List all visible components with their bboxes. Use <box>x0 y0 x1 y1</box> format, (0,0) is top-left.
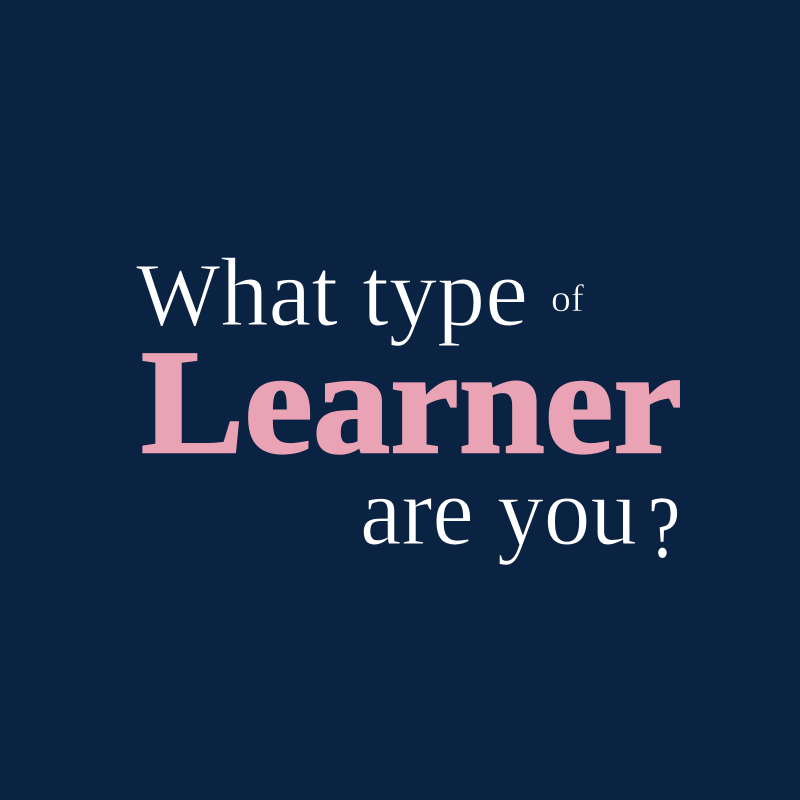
heading line: What type: What type <box>136 239 528 346</box>
heading word: of: of <box>551 278 584 320</box>
heading mark: question mark: ? <box>648 480 680 577</box>
heading word: Learner: Learner <box>141 320 682 485</box>
heading line: are you: are you <box>360 458 637 566</box>
